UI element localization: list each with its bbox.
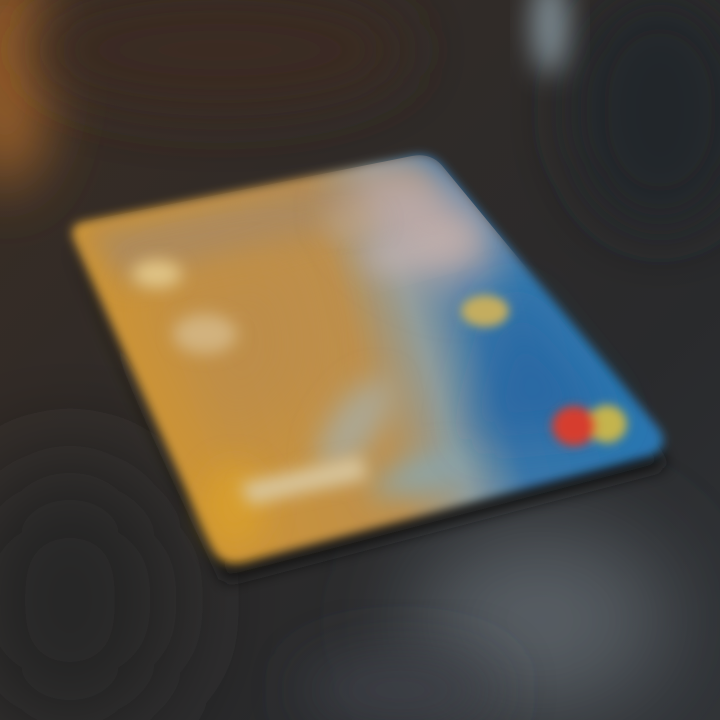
light streak: top right <box>532 0 568 75</box>
credit card <box>72 142 663 563</box>
white glare: top right of card <box>322 142 519 308</box>
card lower-left gold <box>205 465 265 545</box>
icon: blurred chip left <box>132 260 182 288</box>
white glare: center of card <box>304 366 472 506</box>
icon: card network logo <box>552 405 627 446</box>
blue area: right of card <box>470 290 620 440</box>
blurred card number strip <box>240 456 368 505</box>
sheen: bottom right surface <box>300 525 670 720</box>
icon: yellow emblem <box>461 295 509 327</box>
card top edge tint <box>85 165 440 285</box>
card shadow <box>65 240 668 582</box>
card body <box>72 155 663 563</box>
card left warm area <box>130 250 320 470</box>
icon: blurred chip lower <box>173 314 237 354</box>
